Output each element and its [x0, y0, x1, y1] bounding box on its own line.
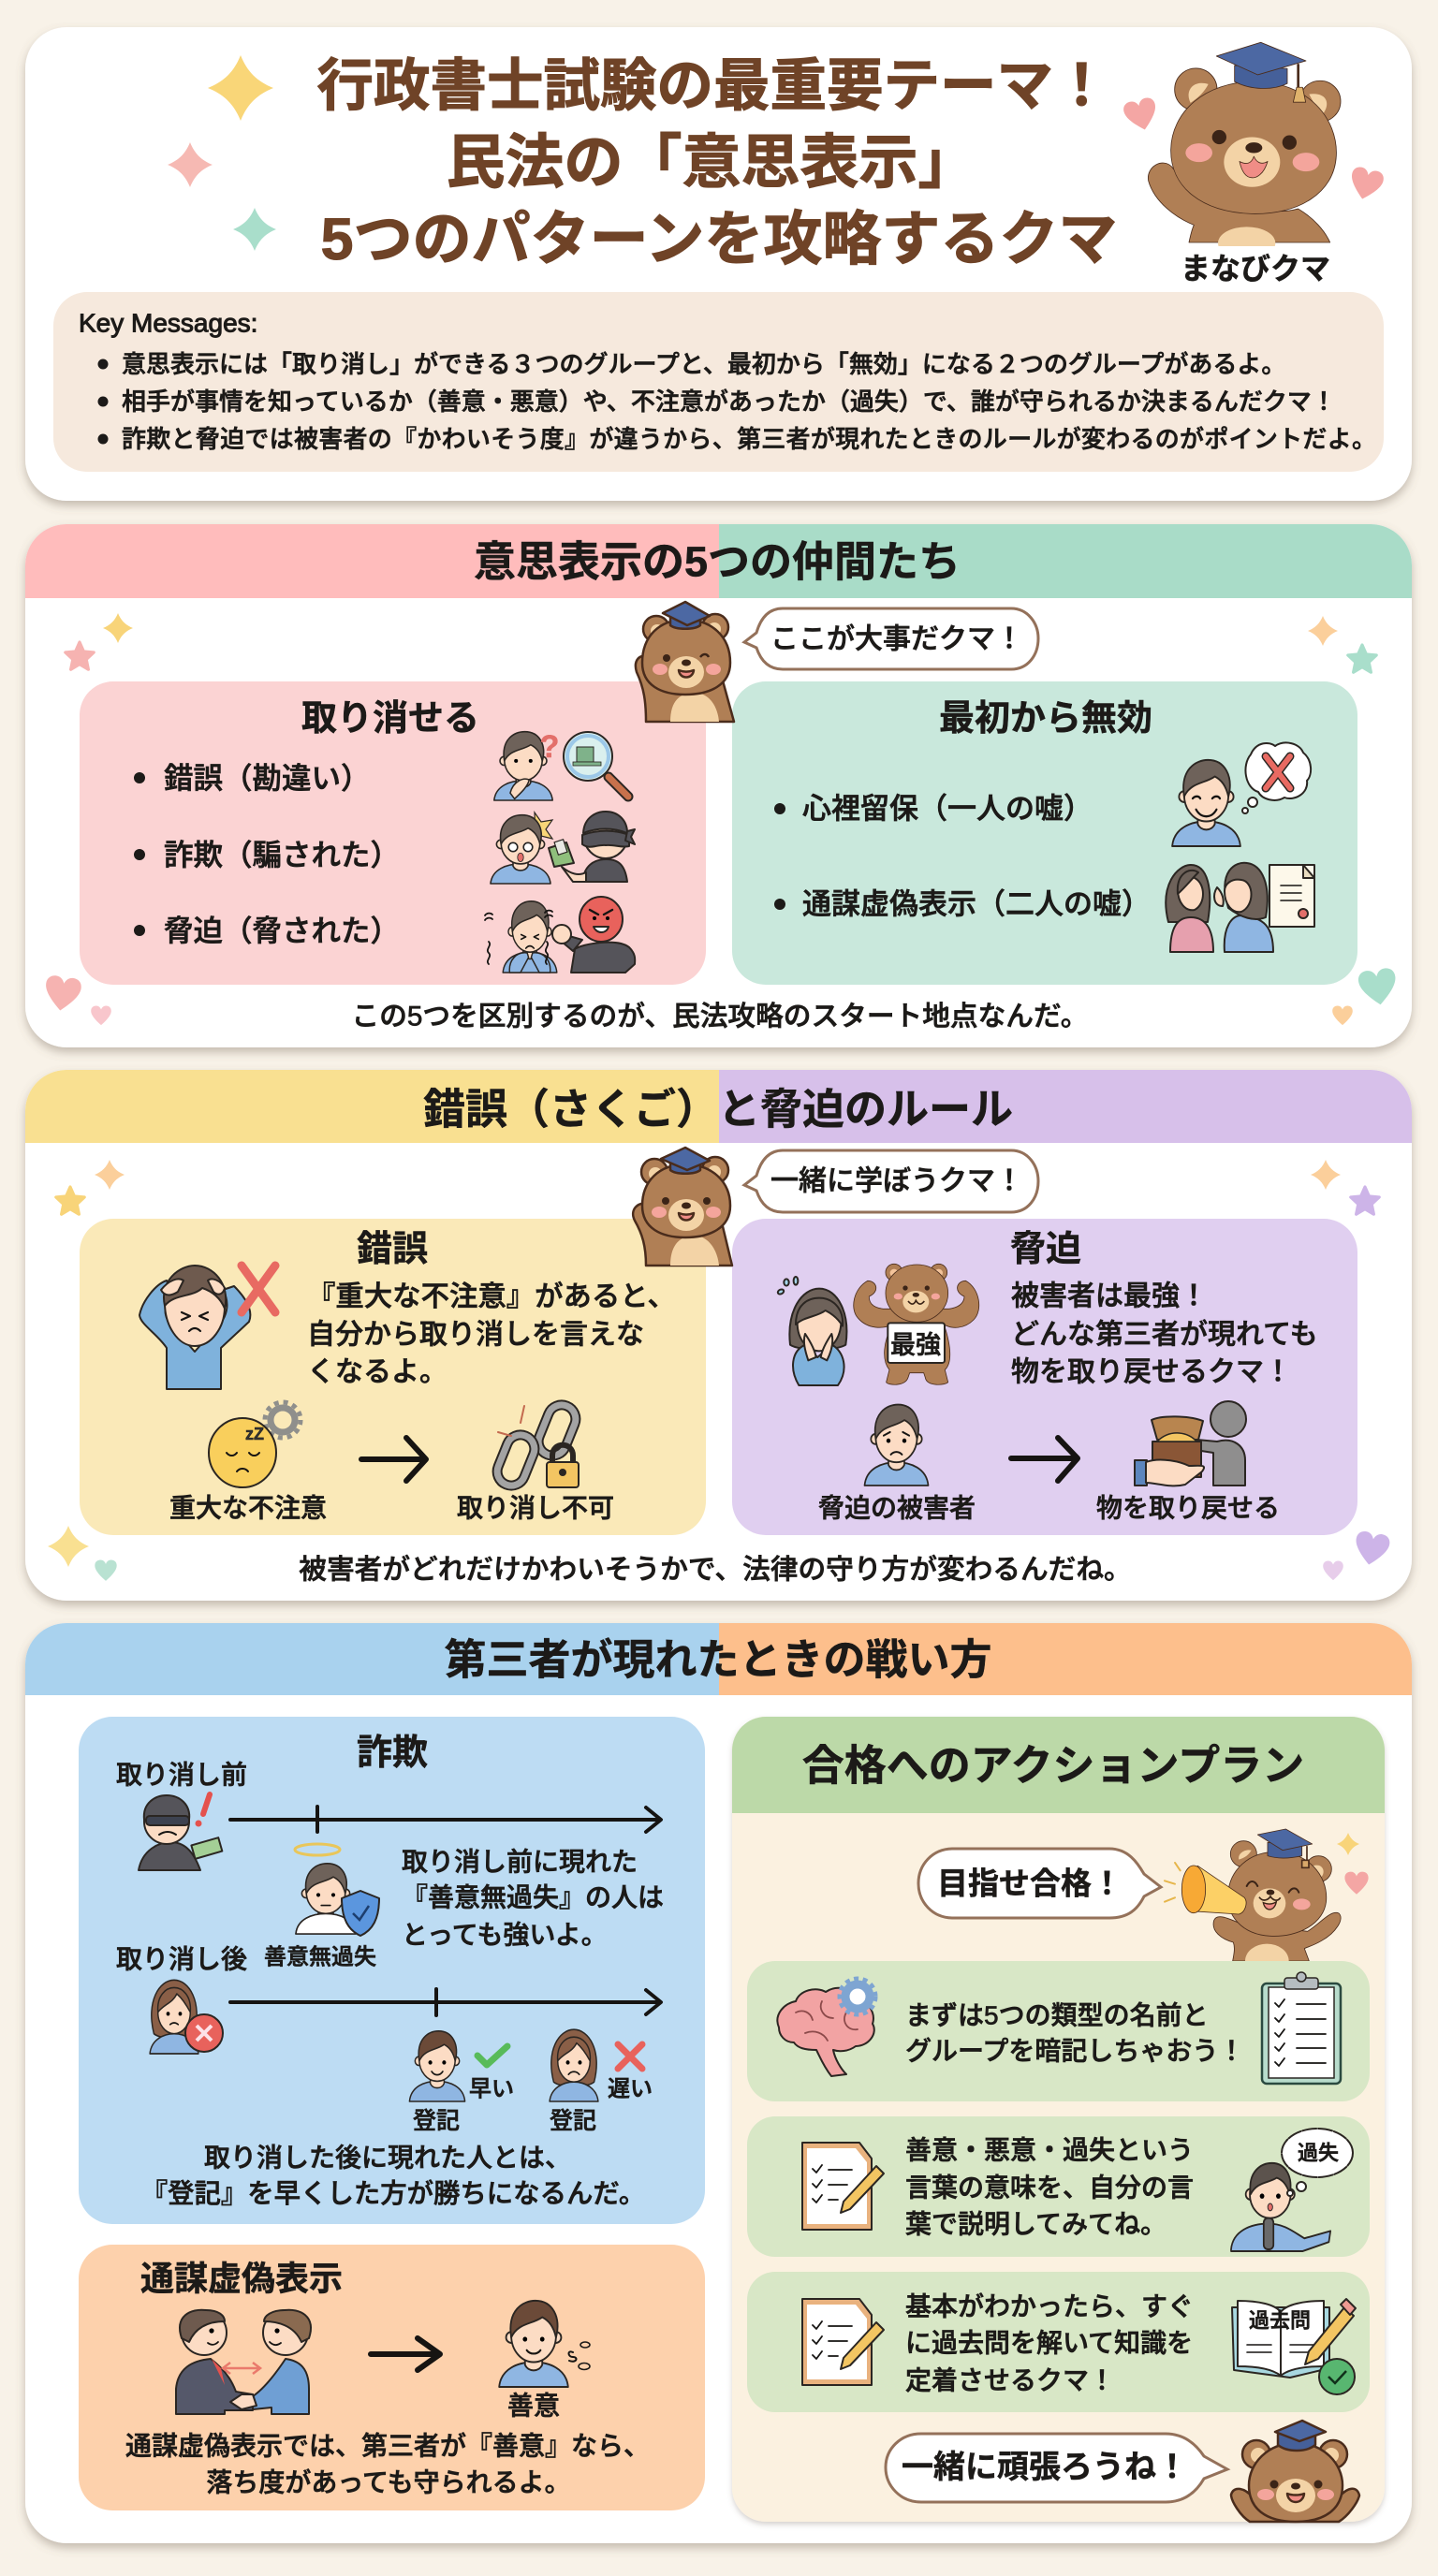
explanation: くなるよ。	[307, 1357, 448, 1387]
list of cancellable types: 詐欺（騙された）	[164, 838, 400, 871]
speech bubble: work hard together	[886, 2434, 1227, 2502]
decorations	[43, 613, 1399, 1025]
key message bullets	[97, 350, 1376, 453]
card heading: 取り消せる	[301, 699, 479, 739]
icon: small bear	[633, 1148, 732, 1266]
icon: smiling person with X thought	[1172, 742, 1311, 846]
panel: five types	[25, 524, 1412, 1047]
card heading: 詐欺	[357, 1734, 428, 1773]
speech bubble: learn together: 一緒に学ぼうクマ！	[770, 1166, 1023, 1196]
step text: 定着させるクマ！	[905, 2366, 1115, 2394]
explanation after: 『登記』を早くした方が勝ちになるんだ。	[141, 2179, 645, 2209]
step 3	[747, 2272, 1370, 2412]
arrow	[1011, 1438, 1078, 1481]
caption: この5つを区別するのが、民法攻略のスタート地点なんだ。	[352, 1002, 1088, 1032]
icon: cheering bear	[1231, 2421, 1359, 2522]
key messages box	[53, 292, 1384, 472]
card: cancellable	[80, 681, 706, 985]
labels	[169, 1494, 614, 1522]
card heading: 最初から無効	[939, 699, 1152, 739]
speech bubble: important: ここが大事だクマ！	[770, 623, 1023, 655]
explanation: どんな第三者が現れても	[1011, 1320, 1318, 1350]
explanation before: 取り消し前に現れた	[402, 1848, 638, 1876]
step text	[905, 2001, 1244, 2065]
step text	[905, 2136, 1194, 2239]
explanation: 通謀虚偽表示では、第三者が『善意』なら、	[125, 2432, 650, 2460]
step text: 言葉の意味を、自分の言	[905, 2174, 1194, 2202]
icon: two men shaking hands	[176, 2310, 311, 2414]
label early: 早い	[469, 2076, 514, 2102]
card heading: 錯誤	[357, 1230, 428, 1269]
icon: small winking bear	[636, 602, 734, 722]
explanation before: とっても強いよ。	[402, 1921, 608, 1949]
section header: 錯誤（さくご）と脅迫のルール	[423, 1086, 1013, 1133]
card heading: 脅迫	[1010, 1230, 1081, 1269]
explanation	[307, 1281, 676, 1387]
label registration: 登記	[550, 2108, 596, 2134]
step 1	[747, 1961, 1370, 2101]
list of void types	[774, 792, 1151, 921]
card header	[732, 1717, 1385, 1813]
decorations	[48, 1160, 1391, 1581]
explanation: 被害者は最強！	[1011, 1281, 1208, 1312]
explanation	[1011, 1281, 1318, 1387]
explanation before	[402, 1848, 664, 1949]
card: void from start	[732, 681, 1357, 985]
icon: heart left of bear	[1122, 96, 1160, 134]
icon: sleepy face and gear: zZ	[245, 1425, 264, 1443]
icon: person holding head with X	[139, 1266, 275, 1389]
panel: title and key messages	[25, 27, 1412, 501]
icon: teal sparkle	[233, 208, 276, 251]
step text	[905, 2291, 1194, 2394]
icon: good-faith person	[499, 2301, 590, 2387]
list of cancellable types: 錯誤（勘違い）	[164, 761, 371, 795]
speech bubble: aim to pass	[918, 1849, 1161, 1918]
step text: 基本がわかったら、すぐ	[905, 2291, 1194, 2321]
label good faith: 善意	[507, 2391, 560, 2421]
section header	[25, 1070, 1412, 1143]
key message bullets: 詐欺と脅迫では被害者の『かわいそう度』が違うから、第三者が現れたときのルールが変わるのがポイントだよ。	[122, 425, 1376, 453]
step 2	[747, 2116, 1370, 2257]
icon: sleepy face and gear	[209, 1402, 301, 1487]
icon: treasure chest returned	[1135, 1401, 1246, 1486]
labels	[818, 1494, 1280, 1522]
speech bubble: work hard together: 一緒に頑張ろうね！	[902, 2450, 1188, 2485]
card: fraud	[79, 1717, 705, 2224]
section header	[25, 1623, 1412, 1695]
card: false declaration	[79, 2245, 705, 2510]
card: mistake	[80, 1219, 706, 1535]
label innocent: 善意無過失	[264, 1945, 376, 1969]
icon: sad victim	[865, 1405, 929, 1486]
section header: 意思表示の5つの仲間たち	[474, 537, 961, 586]
speech bubble: aim to pass: 目指せ合格！	[937, 1866, 1123, 1900]
explanation after: 取り消した後に現れた人とは、	[204, 2144, 571, 2172]
explanation before: 『善意無過失』の人は	[402, 1883, 664, 1911]
icon: clipboard checklist	[1262, 1972, 1341, 2084]
title: 行政書士試験の最重要テーマ！	[316, 53, 1110, 117]
label registration: 登記	[413, 2108, 460, 2134]
icon: checklist and pencil	[802, 2299, 884, 2385]
caption: 被害者がどれだけかわいそうかで、法律の守り方が変わるんだね。	[299, 1554, 1132, 1586]
key message bullets: 意思表示には「取り消し」ができる３つのグループと、最初から「無効」になる２つのグループがあるよ。	[122, 350, 1285, 378]
labels: 重大な不注意	[169, 1494, 327, 1522]
key message bullets: 相手が事情を知っているか（善意・悪意）や、不注意があったか（過失）で、誰が守られるか決まるんだクマ！	[122, 388, 1336, 416]
icon: heart right of bear	[1347, 166, 1386, 203]
title	[316, 53, 1117, 272]
title: 民法の「意思表示」	[446, 130, 977, 196]
explanation: 落ち度があっても守られるよ。	[206, 2467, 571, 2497]
speech bubble: important	[744, 608, 1038, 669]
timeline after	[230, 1989, 661, 2015]
key messages heading: Key Messages:	[79, 309, 257, 337]
arrow	[371, 2338, 440, 2370]
label after: 取り消し後	[116, 1945, 247, 1973]
list of cancellable types	[134, 761, 400, 947]
step text: グループを暗記しちゃおう！	[905, 2037, 1244, 2065]
step text: に過去問を解いて知識を	[905, 2329, 1193, 2357]
explanation after	[141, 2144, 645, 2209]
icon: puzzled person and magnifier	[494, 729, 628, 800]
icon: yellow sparkle	[208, 55, 273, 121]
labels: 取り消し不可	[457, 1494, 614, 1522]
icon: woman with cancel badge	[150, 1980, 223, 2054]
labels: 脅迫の被害者	[818, 1494, 976, 1522]
explanation: 自分から取り消しを言えな	[307, 1320, 644, 1350]
step text: まずは5つの類型の名前と	[905, 2001, 1209, 2029]
icon: frightened person and angry threatener	[485, 897, 635, 973]
icon: late registrant	[550, 2029, 642, 2101]
icon: broken chain and lock	[493, 1400, 580, 1490]
icon: brain and gear	[777, 1979, 875, 2076]
list of cancellable types: 脅迫（脅された）	[164, 914, 400, 947]
icon: speaker with thought: 過失	[1298, 2142, 1339, 2164]
step text: 善意・悪意・過失という	[905, 2136, 1194, 2164]
icon: thief with money	[139, 1794, 222, 1870]
decorations	[1337, 1833, 1369, 1895]
section header	[25, 524, 1412, 598]
mascot name: まなびクマ	[1181, 252, 1330, 285]
icon: surprised person and thief with wallet	[491, 812, 635, 884]
icon: bear with megaphone	[1165, 1829, 1341, 1978]
icon: checklist and pencil	[802, 2143, 884, 2230]
arrow	[361, 1438, 426, 1481]
explanation	[125, 2432, 650, 2497]
speech bubble: learn together	[744, 1150, 1038, 1212]
title: 5つのパターンを攻略するクマ	[321, 207, 1117, 272]
explanation: 『重大な不注意』があると、	[307, 1281, 676, 1312]
icon: two people whispering and document	[1166, 863, 1314, 952]
icon: past exam book: 過去問	[1249, 2308, 1311, 2333]
icon: innocent person with halo and shield	[295, 1844, 379, 1936]
panel: third party battle	[25, 1623, 1412, 2543]
label late: 遅い	[608, 2076, 653, 2102]
section header: 第三者が現れたときの戦い方	[444, 1636, 992, 1683]
step text: 葉で説明してみてね。	[905, 2209, 1167, 2239]
timeline before	[230, 1807, 661, 1832]
labels: 物を取り戻せる	[1096, 1494, 1280, 1522]
panel: mistake and duress rules	[25, 1070, 1412, 1601]
card: duress	[732, 1219, 1357, 1535]
explanation: 物を取り戻せるクマ！	[1011, 1357, 1292, 1387]
label before: 取り消し前	[116, 1760, 247, 1790]
icon: early registrant	[409, 2031, 507, 2101]
icon: puzzled person and magnifier: ?	[540, 729, 559, 765]
card heading: 通謀虚偽表示	[140, 2260, 343, 2297]
icon: past exam book	[1232, 2299, 1356, 2394]
list of void types: 通謀虚偽表示（二人の嘘）	[802, 887, 1151, 921]
card: action plan	[732, 1717, 1385, 2522]
icon: crying woman and strong bear	[777, 1264, 979, 1385]
icon: graduation bear mascot	[1148, 42, 1341, 259]
card header: 合格へのアクションプラン	[802, 1741, 1304, 1790]
sign label on bear: 最強	[890, 1331, 941, 1359]
icon: pink sparkle	[168, 142, 213, 187]
list of void types: 心裡留保（一人の嘘）	[802, 792, 1093, 826]
icon: speaker with thought	[1231, 2129, 1353, 2251]
